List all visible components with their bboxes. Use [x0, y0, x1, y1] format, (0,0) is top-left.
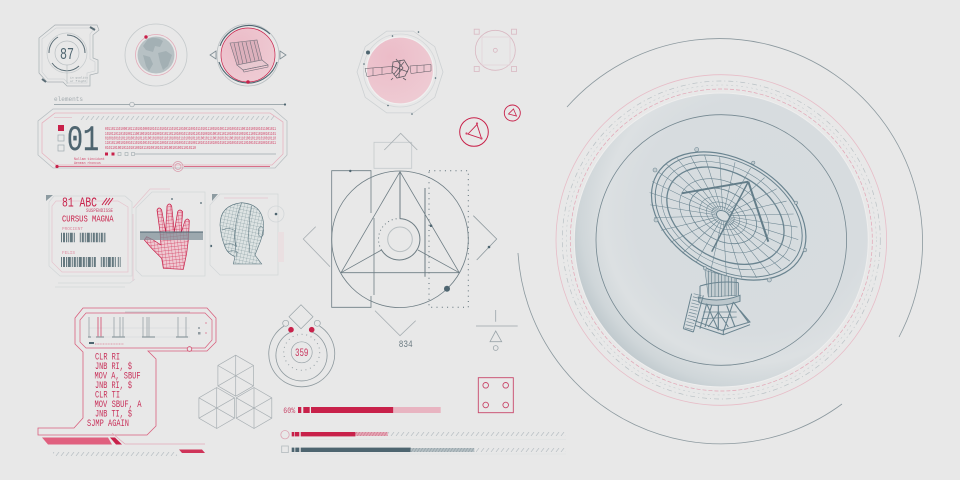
central geometry diagram: 834 [399, 340, 413, 351]
gauge badge 87: in quality [70, 76, 88, 80]
assembly code: SJMP AGAIN [87, 418, 129, 430]
hexagon cubes [199, 355, 272, 428]
rim lugs [653, 148, 807, 282]
target icon with corner squares [474, 29, 516, 72]
head wireframe [220, 203, 264, 264]
assembly code [87, 352, 142, 430]
progress bar red [281, 430, 566, 440]
big number 01: 01 [67, 121, 99, 161]
dial 359 [269, 305, 335, 387]
panel: hand scan [133, 189, 212, 281]
binary block [105, 126, 276, 151]
panel: head scan [210, 194, 284, 275]
gauge badge 87: or flight [70, 79, 86, 83]
assembly code: CLR RI [95, 352, 120, 364]
satellite [365, 59, 431, 80]
gauge badge 87 [39, 25, 99, 86]
icon: globe [125, 24, 187, 86]
waveform chart [88, 317, 207, 344]
progress bar 60% [283, 407, 441, 416]
assembly code: MOV A, SBUF [94, 370, 140, 382]
outer arcs [518, 39, 923, 444]
panel: ID card: 81 ABC [62, 196, 97, 212]
status squares [58, 125, 64, 151]
icon: triangle and line [476, 310, 518, 350]
assembly code: CLR TI [95, 390, 120, 402]
assembly code: JNB RI, $ [95, 380, 132, 392]
binary block: 0100100101011010010101101001010010110101001011010010110100101110010101011001010110100101101010010110 [105, 135, 276, 141]
panel: 01 data readout: Nullam tincidunt [74, 157, 105, 161]
label: elements with rule: elements [54, 96, 83, 103]
panel: code terminal [38, 308, 216, 456]
binary block: 1101011001010010110101001011010110010110101001011010011010110101001010110100101011010010110100101011 [105, 140, 276, 146]
feed struts [682, 182, 768, 252]
progress bar 60%: 60% [283, 407, 295, 416]
dial 359: 359 [295, 348, 308, 360]
panel: ID card: PROCIENT [62, 226, 83, 232]
binary block: 1010110110101001110010010101010010101101101001011010110101001010010110110100101001011100110100101101 [105, 131, 276, 137]
progress bar slate [282, 446, 566, 454]
central geometry diagram [303, 133, 497, 351]
assembly code: JNB TI, $ [95, 408, 132, 420]
binary block: 01011010010110101001011010010101101001010011010110 [105, 145, 196, 151]
panel: ID card: CURSUS MAGNA [62, 214, 114, 224]
assembly code: JNB RI, $ [95, 361, 132, 373]
gauge badge 87: 87 [60, 45, 74, 64]
icon: laptop [210, 24, 286, 86]
icon: triangle node small [504, 105, 520, 121]
panel: ID card [46, 195, 135, 287]
radar dish panel [518, 39, 923, 444]
indicator row [105, 152, 276, 156]
dish wireframe [628, 125, 829, 335]
panel: 01 data readout: Aenean rhoncus [74, 161, 101, 165]
panel: ID card: FELIS [62, 250, 75, 256]
pedestal [683, 270, 750, 335]
stripe bars [42, 433, 205, 456]
panel: 01 data readout [38, 109, 287, 172]
binary block: 0011011101000101110101000010101101010110101101001100101101011100101001110100101100110100101011001011 [105, 126, 276, 132]
icon: four dot square [478, 378, 513, 413]
hand wireframe [144, 204, 189, 269]
panel: ID card: SUSPENDISSE [86, 208, 113, 214]
icon: triangle node large [460, 118, 488, 146]
satellite badge [357, 31, 443, 115]
label: elements with rule [54, 96, 286, 107]
bowl disc [574, 92, 869, 388]
assembly code: MOV SBUF, A [94, 399, 142, 411]
pink and dashed rings [556, 75, 887, 405]
